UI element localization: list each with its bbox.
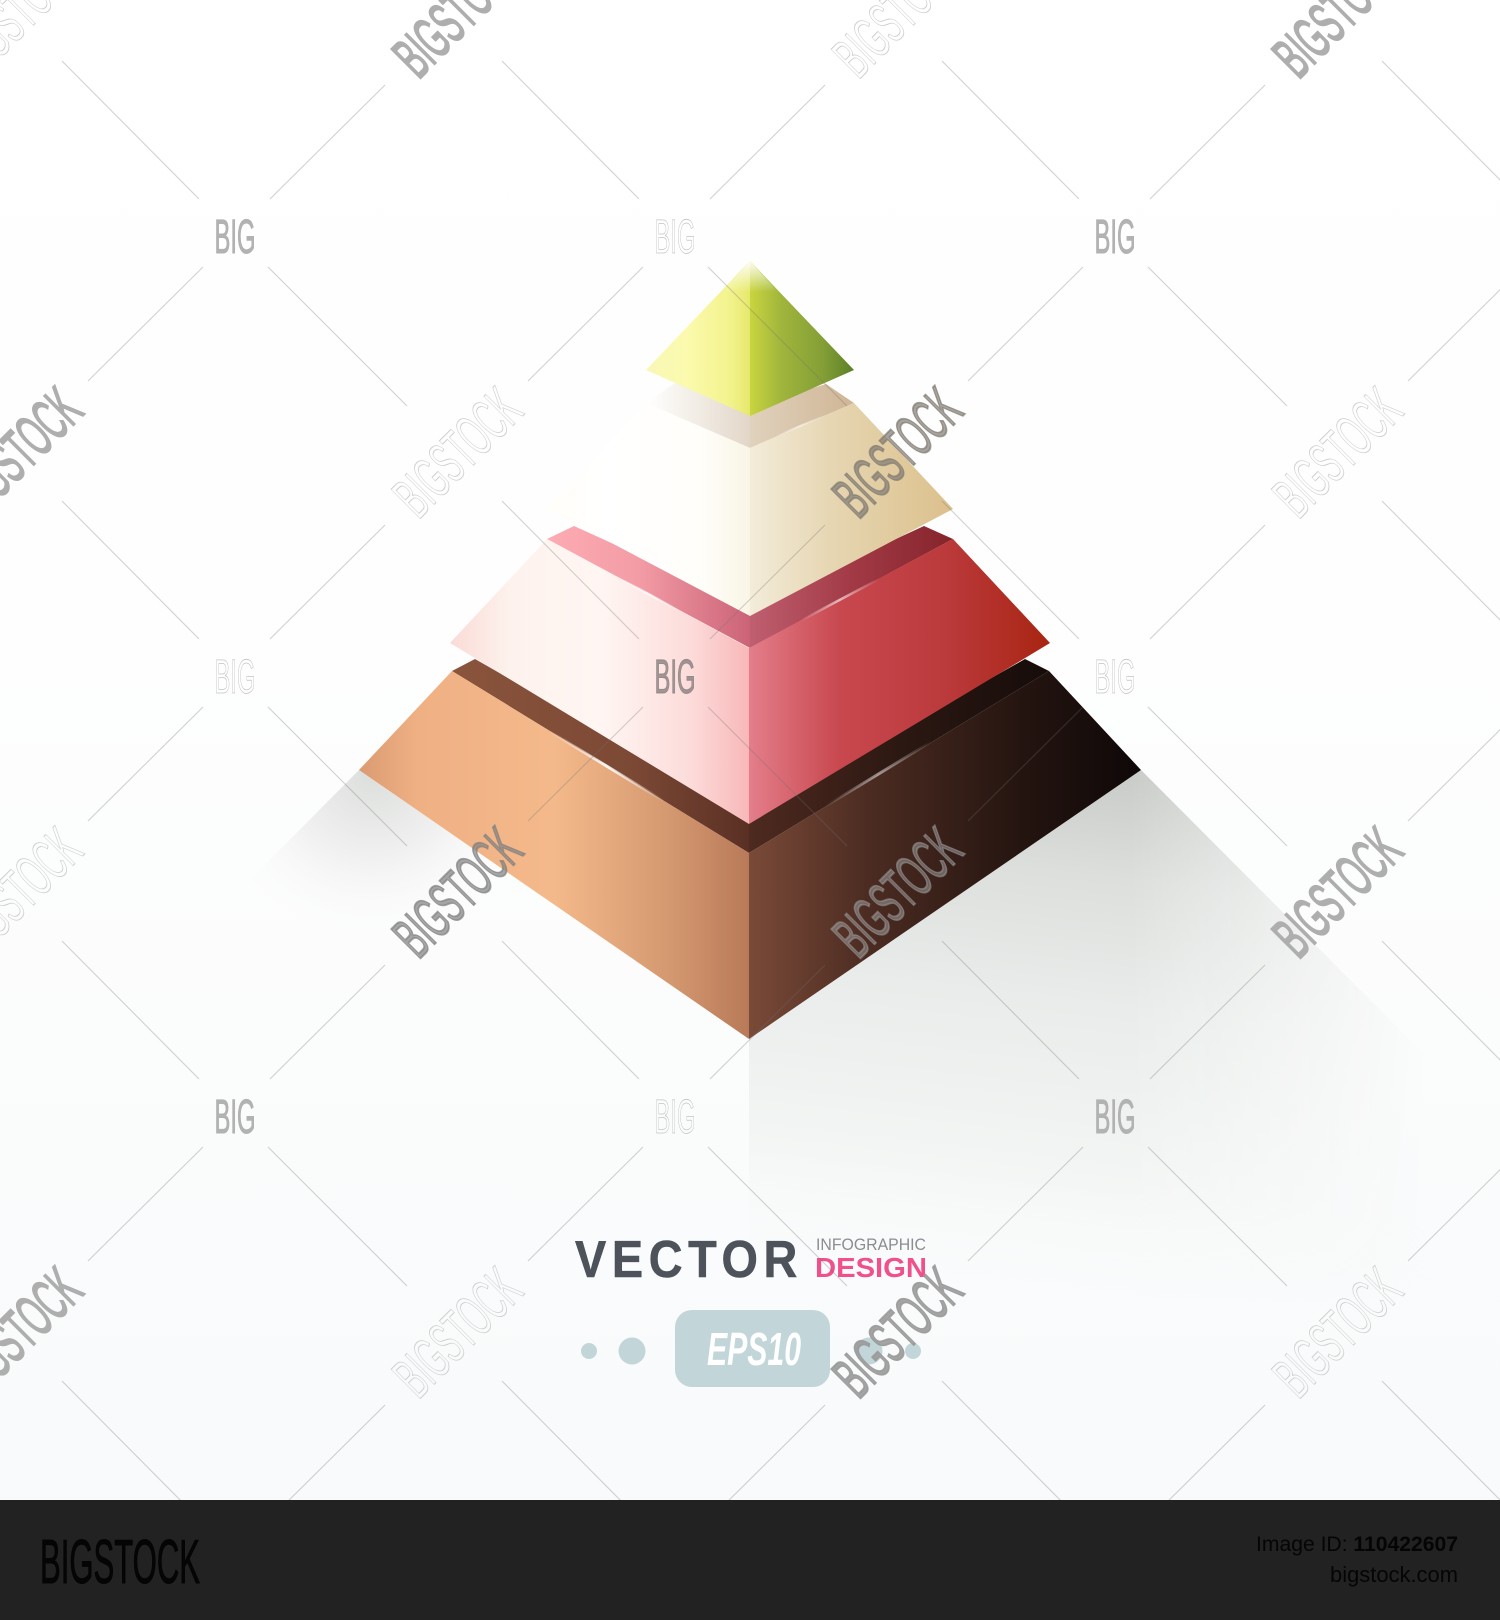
pill label: EPS10 — [707, 1323, 801, 1375]
text: BIG — [1094, 651, 1136, 704]
long shadow: left — [225, 770, 749, 1240]
dot — [905, 1343, 921, 1359]
footer logo: BIGSTOCK — [40, 1528, 200, 1597]
tier 4: green apex — [646, 261, 854, 416]
badge: EPS10 with dots — [581, 1310, 921, 1387]
title: VECTOR INFOGRAPHIC DESIGN — [575, 1231, 927, 1289]
text: BIG — [1094, 1091, 1136, 1144]
watermark: diagonal BIGSTOCK labels: BIGSTOCK — [820, 815, 974, 969]
watermark: diagonal BIGSTOCK labels: BIGSTOCK — [820, 1255, 974, 1409]
pyramid — [359, 261, 1141, 1039]
watermark: diagonal BIGSTOCK labels: BIGSTOCK — [380, 375, 534, 529]
watermark: diagonal BIGSTOCK labels: BIGSTOCK — [380, 1255, 534, 1409]
watermark: diagonal BIGSTOCK labels: BIGSTOCK — [820, 375, 974, 529]
dot — [581, 1343, 597, 1359]
watermark: BIG labels: BIG — [214, 211, 256, 264]
heading: VECTOR: VECTOR — [575, 1231, 797, 1289]
long shadow: right — [749, 770, 1339, 1170]
subheading: INFOGRAPHIC: INFOGRAPHIC — [816, 1236, 926, 1254]
footer bar — [0, 1500, 1500, 1620]
footer image id: Image ID: 110422607 — [1256, 1533, 1458, 1556]
watermark: BIG labels: BIG — [654, 1091, 696, 1144]
dot — [856, 1338, 882, 1364]
tier 3: cream — [547, 383, 953, 616]
dot — [618, 1338, 646, 1364]
subheading: DESIGN: DESIGN — [815, 1252, 927, 1283]
tier 2: red — [450, 526, 1050, 824]
watermark: BIG labels — [214, 211, 1136, 1144]
tier 1: base brown — [359, 659, 1141, 1039]
watermark: BIG labels: BIG — [654, 651, 696, 704]
watermark: BIG labels: BIG — [214, 651, 256, 704]
footer site: bigstock.com — [1330, 1562, 1458, 1587]
watermark: BIG labels: BIG — [214, 1091, 256, 1144]
pill — [675, 1310, 830, 1387]
text: BIG — [1094, 211, 1136, 264]
watermark: BIG labels: BIG — [654, 211, 696, 264]
watermark: diagonal BIGSTOCK labels: BIGSTOCK — [380, 815, 534, 969]
